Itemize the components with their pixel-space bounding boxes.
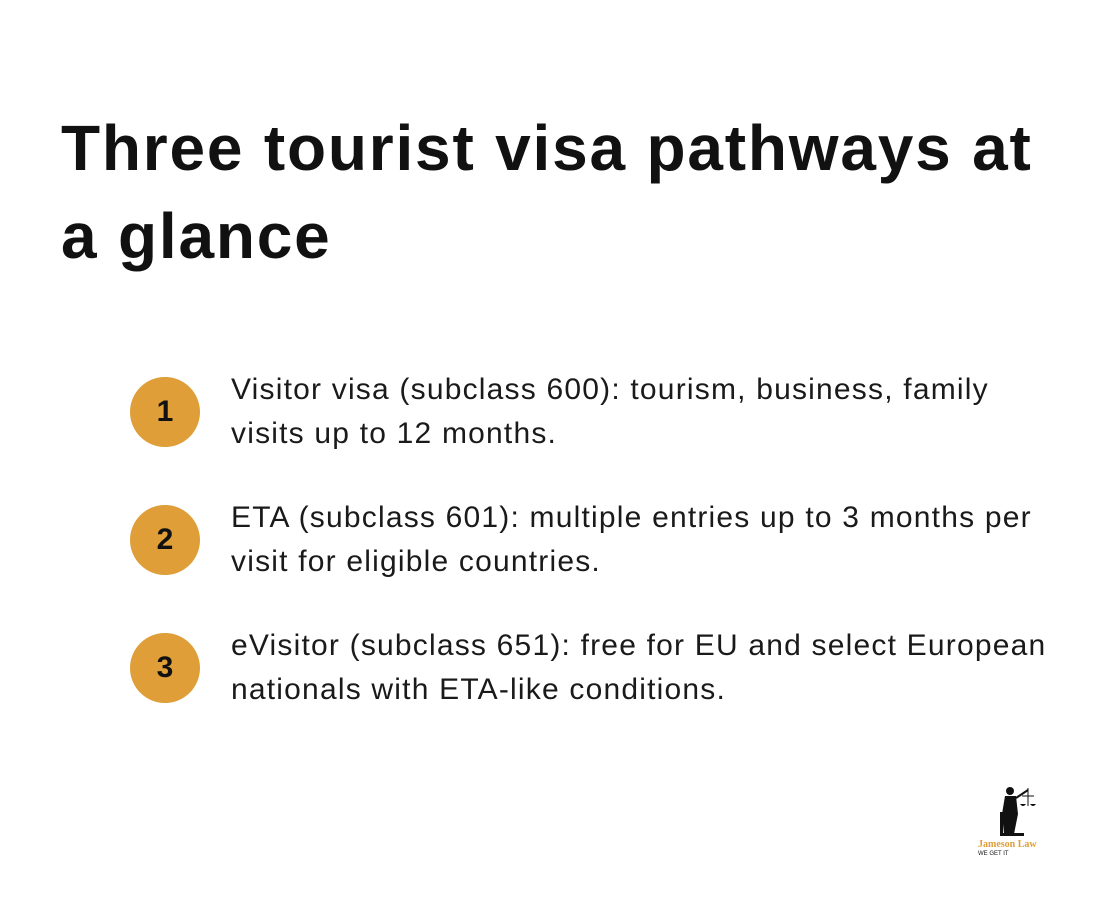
tagline: WE GET IT — [978, 851, 1009, 857]
text 1 — [231, 373, 989, 450]
title: Three tourist visa pathways at a glance — [61, 112, 1033, 272]
badge 2 — [130, 505, 200, 575]
text 2 — [231, 501, 1032, 578]
brand name: Jameson Law — [978, 839, 1037, 850]
text 3: nationals with ETA-like conditions. — [231, 673, 726, 706]
item 1 — [130, 373, 989, 450]
badge 1 — [130, 377, 200, 447]
text 3: eVisitor (subclass 651): free for EU and select European — [231, 629, 1046, 662]
logo — [978, 787, 1037, 857]
item 2 — [130, 501, 1032, 578]
badge 3 — [130, 633, 200, 703]
badge 2: 2 — [157, 523, 173, 556]
icon: justice figure — [1000, 787, 1036, 836]
text 2: ETA (subclass 601): multiple entries up to 3 months per — [231, 501, 1032, 534]
text 2: visit for eligible countries. — [231, 545, 601, 578]
item 3 — [130, 629, 1046, 706]
text 3 — [231, 629, 1046, 706]
text 1: Visitor visa (subclass 600): tourism, business, family — [231, 373, 989, 406]
text 1: visits up to 12 months. — [231, 417, 557, 450]
badge 3: 3 — [157, 651, 173, 684]
badge 1: 1 — [157, 395, 173, 428]
